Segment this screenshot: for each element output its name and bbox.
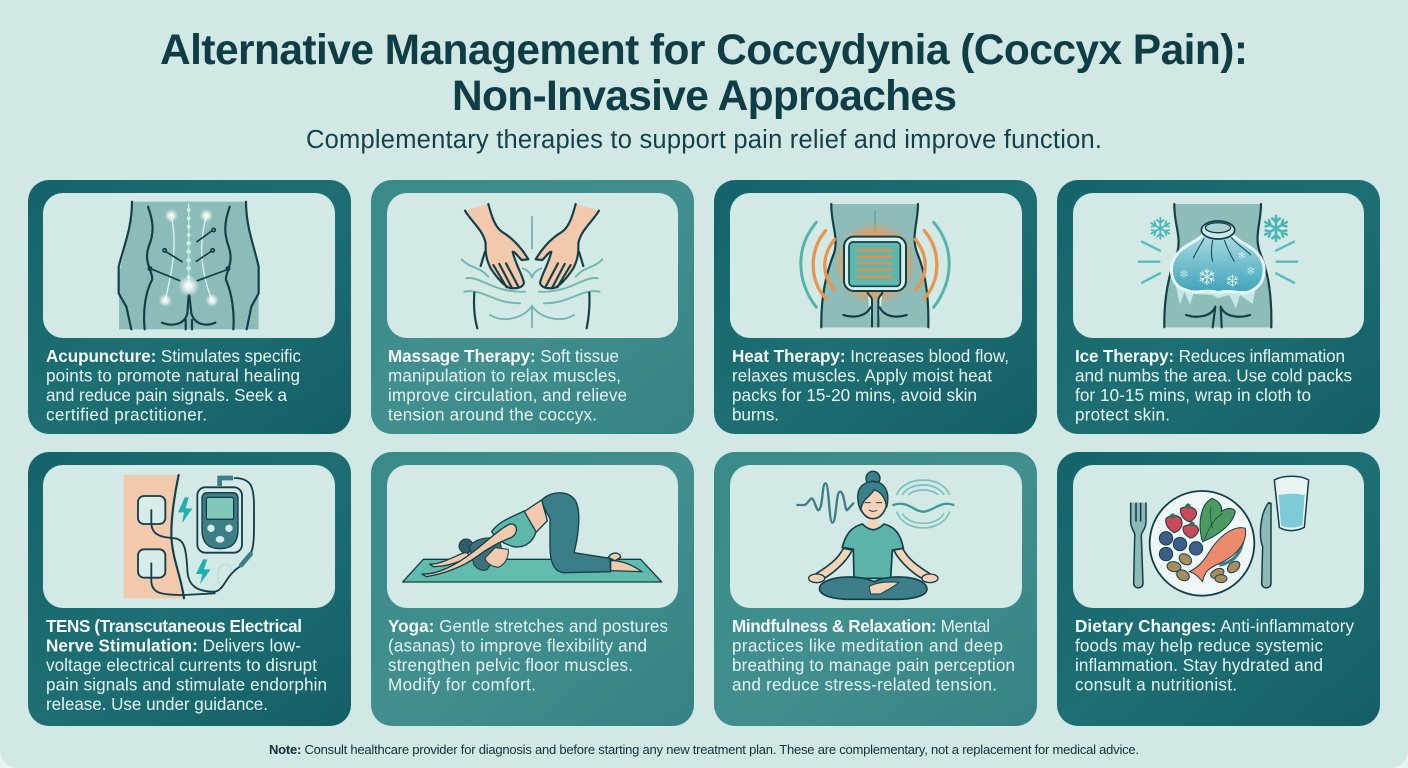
icon: plate of food <box>1131 476 1309 596</box>
text: acupuncture: Acupuncture: Stimulates specific <box>46 347 301 366</box>
text: massage therapy: improve circulation, and relieve <box>388 386 627 405</box>
text: massage therapy: tension around the coccyx. <box>388 406 597 424</box>
text: TENS: TENS (Transcutaneous Electrical <box>46 617 302 636</box>
panel: yoga <box>371 452 694 726</box>
icon: meditating person <box>797 471 953 599</box>
icon: massage hands <box>462 204 602 328</box>
text: dietary changes: Dietary Changes: Anti-inflammatory <box>1075 617 1354 636</box>
panel: massage therapy <box>371 180 694 434</box>
title: Alternative Management for Coccydynia (Coccyx Pain): <box>160 27 1248 74</box>
text: ice therapy: protect skin. <box>1075 406 1170 424</box>
panel: heat therapy <box>714 180 1037 434</box>
text: TENS: pain signals and stimulate endorphin <box>46 676 327 694</box>
panel: ice therapy <box>1057 180 1380 434</box>
text: TENS <box>46 617 327 714</box>
text: heat therapy: burns. <box>732 406 779 424</box>
text: mindfulness: and reduce stress-related tension. <box>732 676 997 694</box>
text: massage therapy: Massage Therapy: Soft tissue <box>388 347 619 366</box>
text: ice therapy: for 10-15 mins, wrap in cloth to <box>1075 386 1311 405</box>
text: heat therapy: relaxes muscles. Apply moist heat <box>732 366 992 386</box>
text: ice therapy <box>1075 347 1352 424</box>
text: heat therapy: Heat Therapy: Increases blood flow, <box>732 347 1009 366</box>
text: mindfulness: Mindfulness & Relaxation: Mental <box>732 617 990 636</box>
icon: heat pack <box>801 204 949 327</box>
text: acupuncture: points to promote natural healing <box>46 366 300 386</box>
icon: yoga pose <box>403 493 662 582</box>
panel: mindfulness <box>714 452 1037 726</box>
panel: dietary changes <box>1057 452 1380 726</box>
icon: ice pack <box>1139 204 1297 327</box>
icon: acupuncture back <box>119 202 259 329</box>
text: TENS: voltage electrical currents to disrupt <box>46 656 317 675</box>
title <box>160 27 1248 120</box>
text: ice therapy: Ice Therapy: Reduces inflammation <box>1075 347 1345 366</box>
text: yoga: Yoga: Gentle stretches and postures <box>388 617 668 636</box>
text: yoga: Modify for comfort. <box>388 676 536 694</box>
text: TENS: Nerve Stimulation: Delivers low- <box>46 636 301 656</box>
text: acupuncture <box>46 347 301 424</box>
text: TENS: release. Use under guidance. <box>46 695 268 714</box>
panel: TENS <box>28 452 351 726</box>
text: acupuncture: certified practitioner. <box>46 406 207 424</box>
text: mindfulness: breathing to manage pain perception <box>732 656 1015 675</box>
text: massage therapy <box>388 347 627 424</box>
subtitle: Complementary therapies to support pain relief and improve function. <box>306 126 1102 154</box>
footer note: Note: Consult healthcare provider for diagnosis and before starting any new treatment plan. These are complementary, not a replacement for medical advice. <box>269 742 1139 757</box>
text: mindfulness <box>732 617 1015 694</box>
text: dietary changes <box>1075 617 1354 694</box>
text: massage therapy: manipulation to relax muscles, <box>388 366 621 386</box>
text: acupuncture: and reduce pain signals. Seek a <box>46 386 287 405</box>
text: mindfulness: practices like meditation and deep <box>732 636 1003 656</box>
panel: acupuncture <box>28 180 351 434</box>
text: yoga: (asanas) to improve flexibility and <box>388 636 647 656</box>
text: ice therapy: and numbs the area. Use cold packs <box>1075 366 1352 386</box>
text: dietary changes: inflammation. Stay hydrated and <box>1075 656 1323 675</box>
text: heat therapy: packs for 15-20 mins, avoid skin <box>732 386 977 405</box>
text: dietary changes: foods may help reduce systemic <box>1075 636 1323 656</box>
text: yoga: strengthen pelvic floor muscles. <box>388 656 633 675</box>
title: Non-Invasive Approaches <box>452 73 957 120</box>
text: yoga <box>388 617 668 694</box>
text: dietary changes: consult a nutritionist. <box>1075 676 1237 694</box>
text: heat therapy <box>732 347 1009 424</box>
icon: TENS device <box>124 475 254 598</box>
